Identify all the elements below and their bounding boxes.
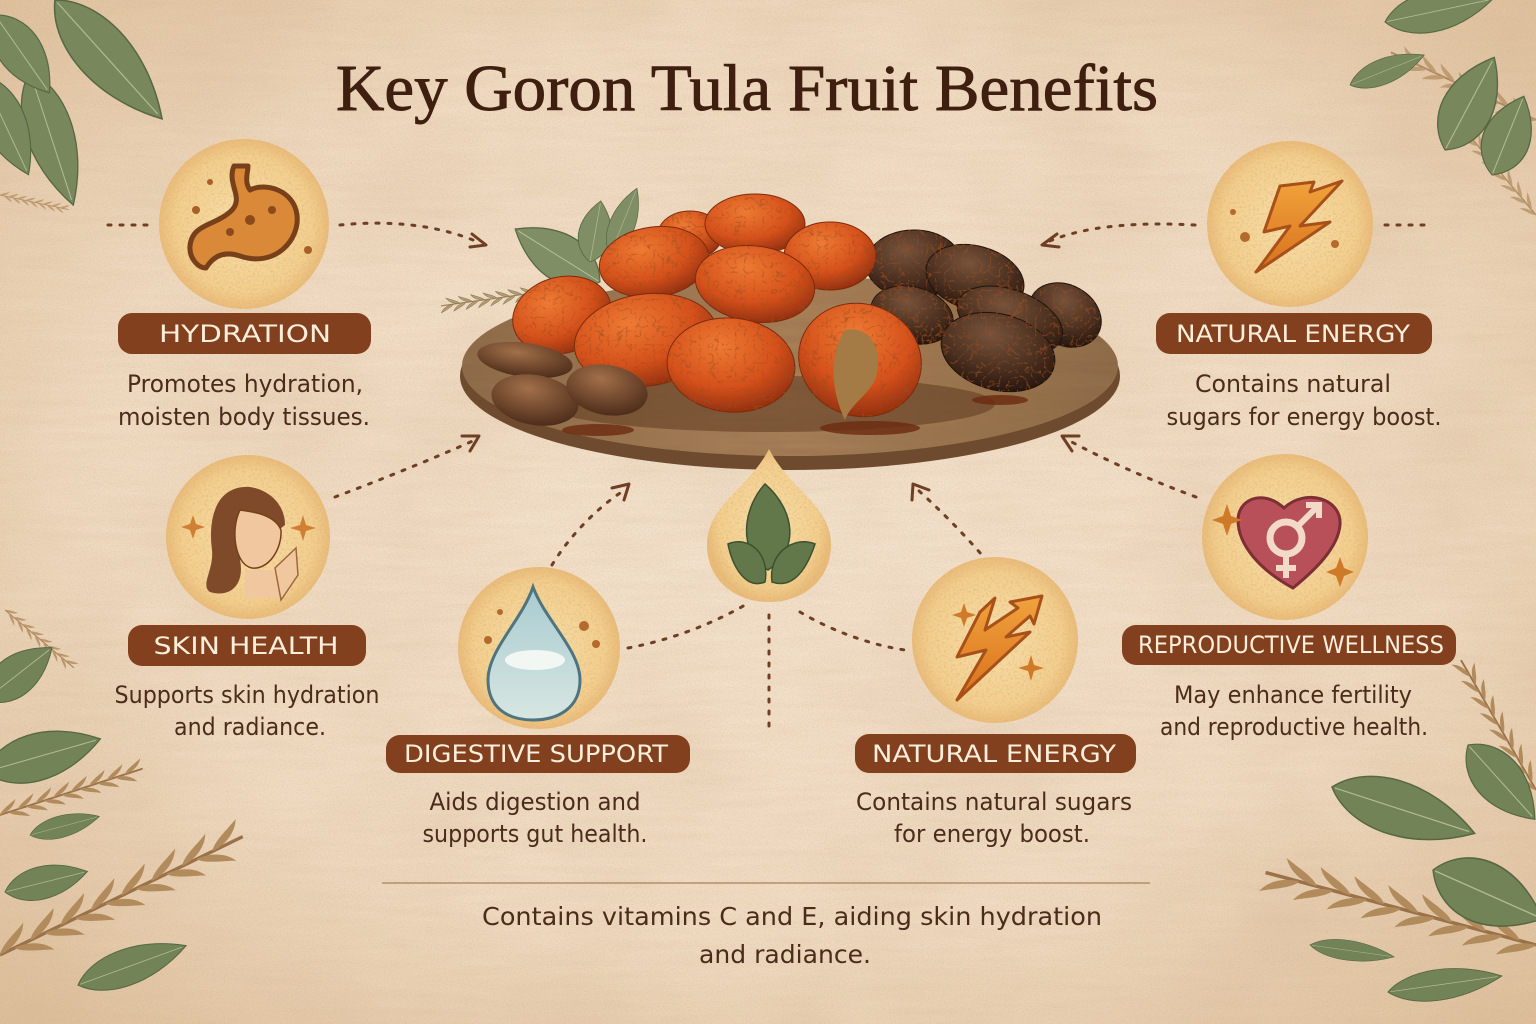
wooden plate (460, 276, 1120, 470)
label pill: SKIN HEALTH (154, 632, 338, 660)
footer note (382, 883, 1150, 969)
description: Contains natural sugars (856, 788, 1132, 816)
cut fruit flesh (833, 329, 878, 420)
description: May enhance fertility (1174, 681, 1412, 709)
central fruit plate (440, 184, 1120, 470)
label pill (128, 625, 366, 666)
corner foliage: bottom right (1259, 654, 1536, 1007)
corner foliage: top left (0, 0, 182, 214)
card: natural energy upper (1156, 141, 1442, 431)
icon: basil leaves behind plate (440, 184, 649, 313)
footer note: and radiance. (699, 940, 871, 969)
description: Supports skin hydration (114, 681, 380, 709)
description: for energy boost. (894, 820, 1090, 848)
corner foliage: bottom left (0, 605, 252, 1002)
description: and reproductive health. (1160, 713, 1428, 741)
label pill (855, 734, 1136, 773)
label pill (118, 313, 371, 354)
description: and radiance. (174, 713, 326, 741)
card: digestive support (386, 567, 690, 848)
footer note: Contains vitamins C and E, aiding skin hydration (482, 902, 1102, 931)
icon: woman face (166, 455, 330, 619)
nuts (475, 336, 652, 432)
label pill: DIGESTIVE SUPPORT (404, 740, 668, 768)
description: sugars for energy boost. (1166, 403, 1442, 431)
label pill: NATURAL ENERGY (1176, 320, 1410, 348)
description: Contains natural (1195, 370, 1391, 398)
description: moisten body tissues. (118, 403, 370, 431)
center leaf drop badge (707, 449, 831, 602)
orange fruit group (504, 194, 937, 434)
label pill: NATURAL ENERGY (872, 740, 1116, 768)
label pill: REPRODUCTIVE WELLNESS (1138, 631, 1444, 659)
icon: lightning arrow (912, 557, 1078, 723)
description (1166, 370, 1442, 431)
card: hydration (118, 139, 371, 431)
label pill (386, 735, 690, 773)
icon: stomach (159, 139, 329, 309)
description: supports gut health. (422, 820, 648, 848)
card: skin health (114, 455, 380, 741)
label pill (1156, 313, 1432, 354)
corner foliage: top right (1345, 0, 1536, 220)
icon: water drop (458, 567, 620, 729)
description (114, 681, 380, 741)
description (856, 788, 1132, 848)
label pill (1122, 625, 1456, 665)
card: reproductive wellness (1122, 454, 1456, 741)
label pill: HYDRATION (159, 320, 331, 348)
description (422, 788, 648, 848)
connector arrows (108, 223, 1430, 735)
icon: heart with symbol (1202, 454, 1368, 620)
syrup drips (562, 395, 1028, 436)
description: Aids digestion and (430, 788, 640, 816)
arrow heads (462, 234, 1079, 500)
title: Key Goron Tula Fruit Benefits (336, 52, 1158, 125)
card: natural energy lower (855, 557, 1136, 848)
dark fruit group (864, 230, 1113, 404)
description (118, 370, 370, 431)
description (1160, 681, 1428, 741)
icon: lightning bolt (1207, 141, 1373, 307)
description: Promotes hydration, (127, 370, 363, 398)
